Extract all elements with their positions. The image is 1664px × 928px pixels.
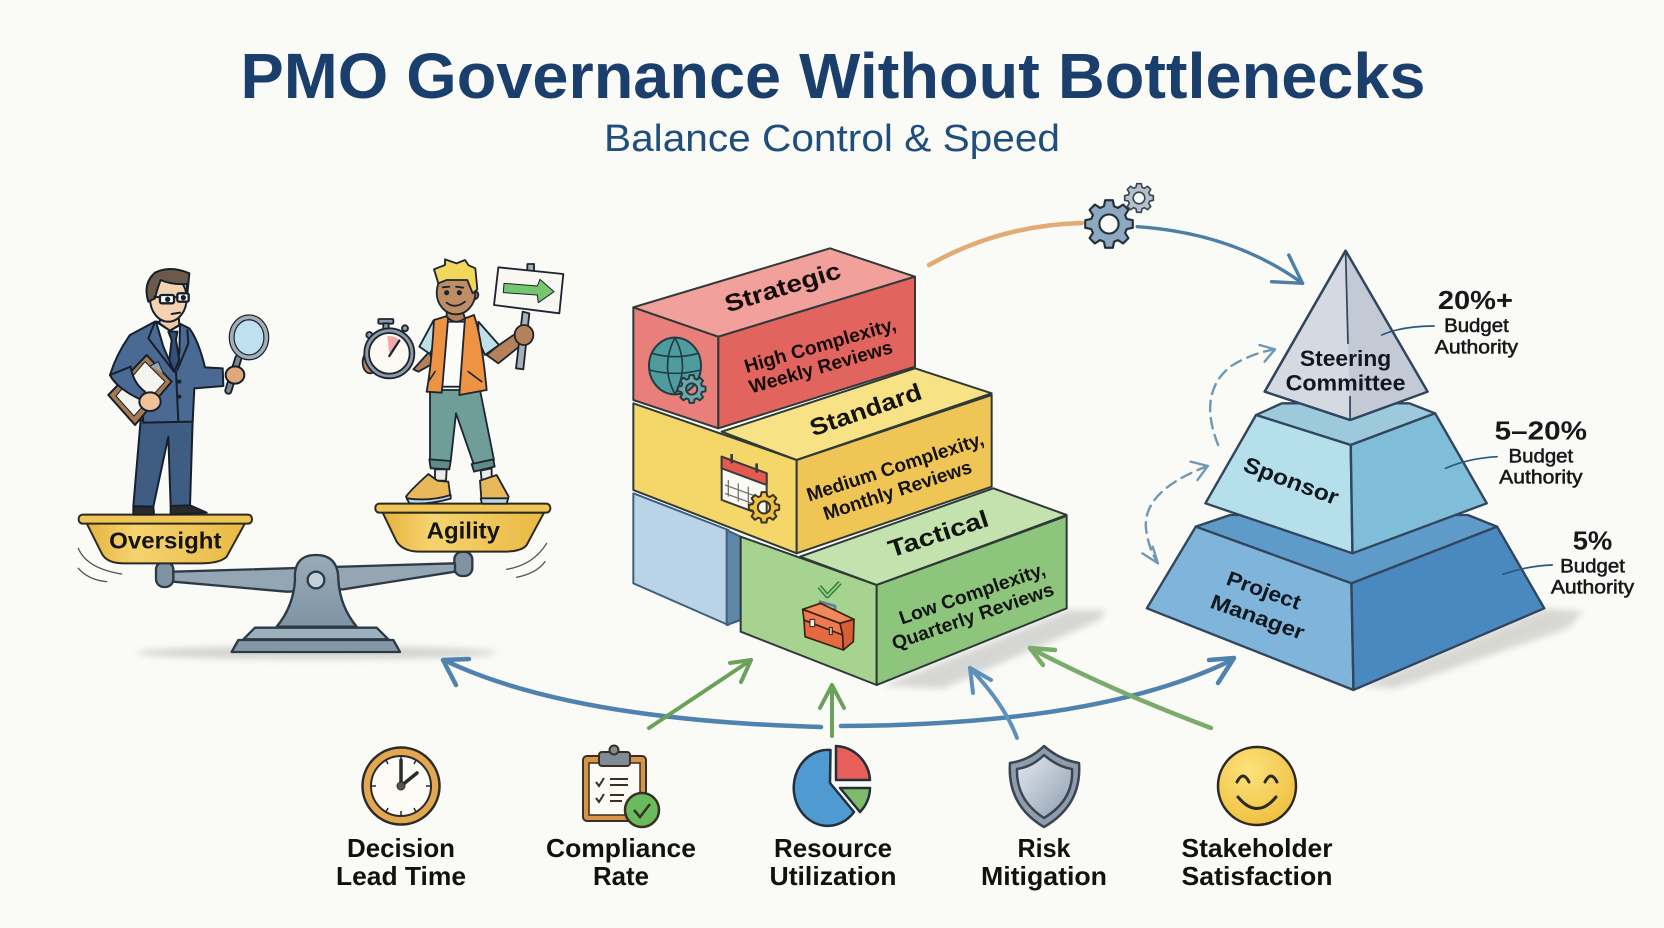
- balance scale: [78, 504, 550, 659]
- pyramid shadow: [1361, 608, 1583, 688]
- block: tactical: [741, 488, 1067, 685]
- blue arrow: risk to tiers: [970, 668, 1017, 738]
- block: strategic: [633, 248, 915, 428]
- metric: resource utilization: Utilization: [770, 861, 896, 891]
- label: Compliance: [546, 833, 696, 863]
- label: 20%+ budget authority: 20%+: [1438, 285, 1513, 315]
- bottom metric arrows: [443, 648, 1234, 738]
- icon: clipboard with check: [583, 746, 659, 827]
- block: strategic: Strategic: [721, 257, 844, 318]
- tier: sponsor: Sponsor: [1240, 452, 1343, 510]
- scale shadow: [137, 646, 497, 659]
- title: PMO Governance Without Bottlenecks: [240, 40, 1426, 112]
- block: strategic: High Complexity,: [742, 314, 899, 378]
- label: 5-20% budget authority: [1495, 416, 1587, 488]
- authority pyramid: [1137, 227, 1634, 690]
- icon: small gear: [1125, 184, 1153, 212]
- governance tier staircase: [633, 248, 1105, 688]
- metric: resource utilization: [770, 746, 896, 891]
- metric: stakeholder satisfaction: Satisfaction: [1182, 861, 1332, 891]
- orange arc to gears: [929, 223, 1082, 265]
- dashed arrow: sponsor to steering: [1210, 345, 1275, 445]
- scale beam and fulcrum: [156, 552, 472, 652]
- label: 20%+ budget authority: Authority: [1435, 337, 1518, 358]
- block: standard: Monthly Reviews: [821, 457, 975, 525]
- figure: oversight manager in suit: [108, 269, 266, 515]
- label: 20%+ budget authority: Budget: [1444, 315, 1509, 337]
- arrow: gears to pyramid: [1137, 227, 1303, 283]
- label: Risk: [1018, 833, 1071, 863]
- icon: large gear: [1085, 200, 1133, 248]
- block: blue base: [633, 493, 741, 625]
- tier: project manager: [1147, 515, 1544, 690]
- label: 5% budget authority: 5%: [1573, 526, 1612, 555]
- metric: decision lead time: Lead Time: [336, 861, 466, 891]
- label: Stakeholder: [1182, 833, 1332, 863]
- block: standard: Medium Complexity,: [804, 429, 987, 506]
- block: standard: Standard: [806, 379, 925, 442]
- tier: steering committee: Steering: [1300, 346, 1391, 371]
- icon: shield: [1010, 746, 1079, 827]
- metric: compliance rate: Rate: [593, 861, 649, 891]
- green arrow: resource to tiers: [820, 685, 844, 736]
- icon: clock: [362, 748, 440, 824]
- leader lines: [1382, 326, 1552, 574]
- tier: steering committee: Committee: [1286, 371, 1405, 395]
- tier: steering committee: [1265, 251, 1428, 420]
- icon: toolbox with check: [803, 583, 854, 650]
- blue arc: left to scale: [443, 659, 821, 727]
- metric: risk mitigation: Mitigation: [981, 861, 1107, 891]
- green arrow: compliance to tiers: [649, 660, 751, 728]
- subtitle: Balance Control & Speed: [604, 118, 1060, 160]
- metric: stakeholder satisfaction: [1182, 747, 1332, 891]
- motion lines: [78, 543, 547, 582]
- label: Resource: [774, 833, 892, 863]
- label: 5% budget authority: Budget: [1560, 556, 1625, 577]
- block: strategic: Weekly Reviews: [747, 337, 895, 398]
- block: tactical: Low Complexity,: [896, 560, 1048, 629]
- label: 20%+ budget authority: [1435, 285, 1518, 358]
- metric: risk mitigation: [981, 746, 1107, 891]
- label: Decision: [347, 833, 455, 863]
- label: 5-20% budget authority: 5–20%: [1495, 416, 1587, 445]
- figure: agile worker in orange vest: [363, 259, 563, 504]
- block: standard: [633, 368, 992, 553]
- blue arc: right to pyramid: [841, 658, 1234, 726]
- icon: globe with gear: [649, 338, 706, 403]
- label: 5-20% budget authority: Budget: [1508, 446, 1574, 468]
- icon: calendar with gear: [722, 454, 779, 523]
- icon: pie chart: [794, 746, 870, 826]
- right pan: agility: [375, 504, 550, 552]
- tier: project manager: Manager: [1207, 591, 1308, 644]
- right pan: agility: Agility: [427, 517, 500, 543]
- tier: sponsor: [1205, 403, 1487, 553]
- label: 5-20% budget authority: Authority: [1499, 467, 1583, 488]
- label: 5% budget authority: Authority: [1551, 577, 1634, 598]
- block: tactical: Tactical: [885, 506, 992, 563]
- stair shadow: [883, 610, 1105, 688]
- label: 5% budget authority: [1551, 526, 1634, 598]
- left pan: oversight: [79, 515, 252, 563]
- block: tactical: Quarterly Reviews: [889, 579, 1057, 655]
- left pan: oversight: Oversight: [109, 528, 222, 554]
- icon: smiley: [1218, 747, 1296, 825]
- metric: compliance rate: [546, 746, 696, 891]
- tier: project manager: Project: [1223, 567, 1304, 614]
- green arrow: stakeholder to tiers: [1030, 648, 1211, 728]
- metric: decision lead time: [336, 748, 466, 891]
- dashed arrow: manager to sponsor: [1142, 462, 1208, 563]
